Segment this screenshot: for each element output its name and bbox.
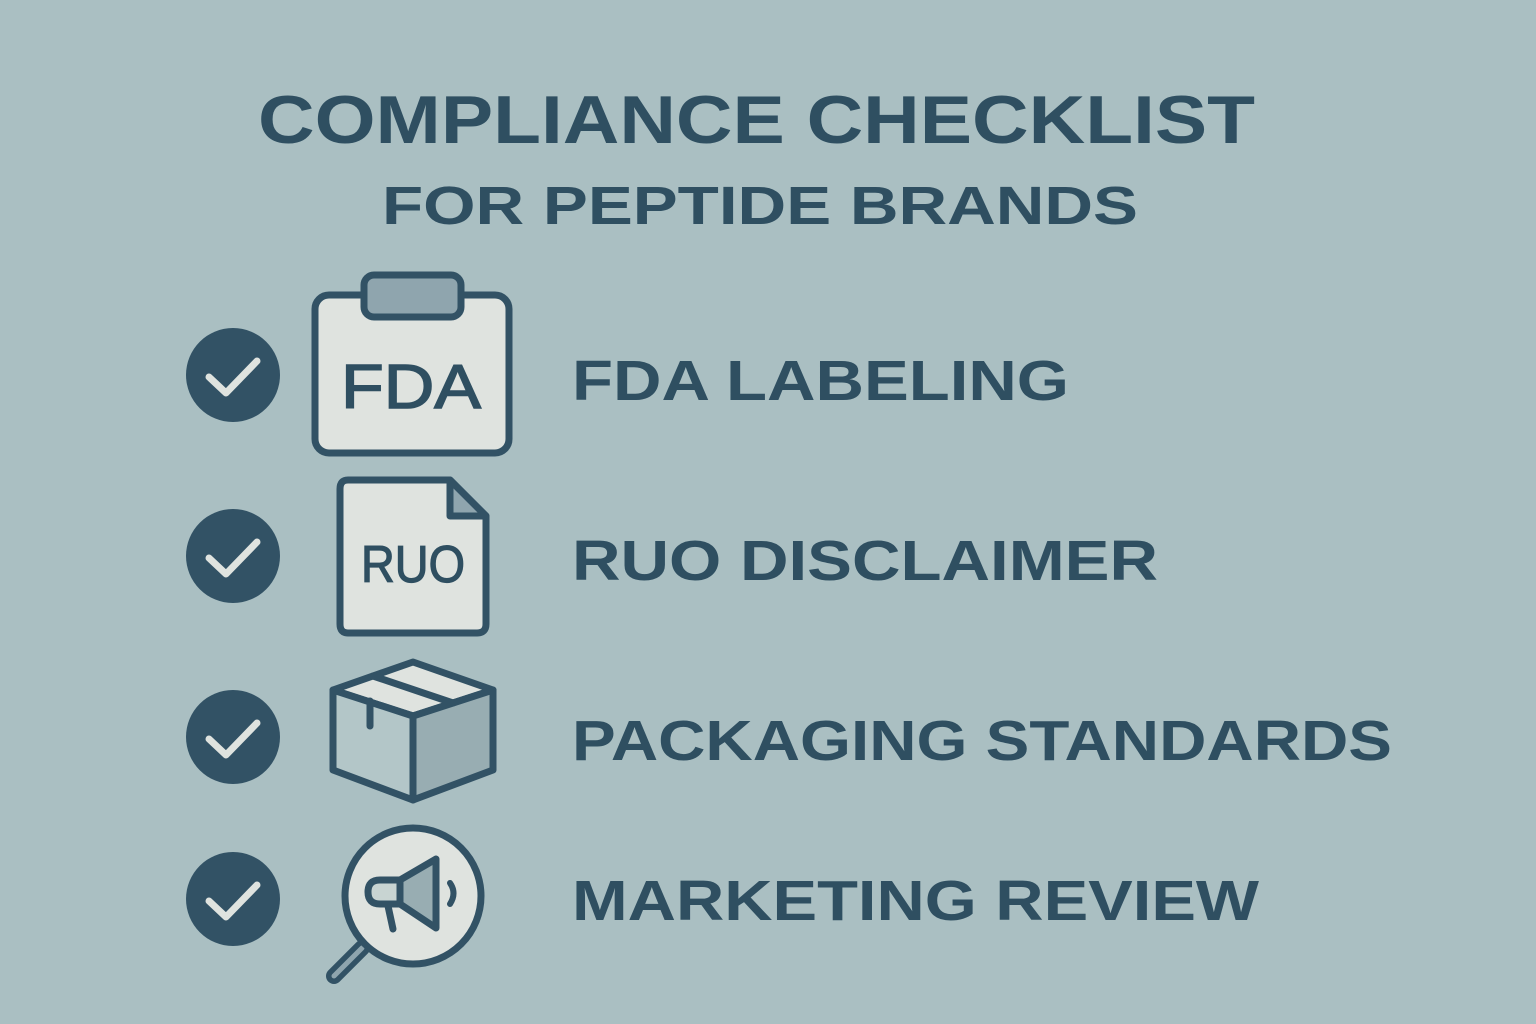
label: FDA labeling: FDA LABELING [572,349,1069,413]
icon: magnifier with megaphone [334,828,481,976]
icon: RUO document [340,480,486,633]
icon: FDA clipboard [315,275,509,453]
subtitle: FOR PEPTIDE BRANDS [382,176,1138,236]
check icon 1 [186,328,280,422]
check icon 3 [186,690,280,784]
row 2: RUO disclaimer [186,480,1158,633]
label: packaging standards: PACKAGING STANDARDS [572,709,1392,773]
check icon 2 [186,509,280,603]
row 1: FDA labeling [186,275,1069,453]
label: marketing review: MARKETING REVIEW [572,869,1259,933]
icon: RUO document: RUO [361,536,465,594]
row 3: Packaging standards [186,662,1392,800]
label: RUO disclaimer: RUO DISCLAIMER [572,529,1158,593]
row 4: Marketing review [186,828,1259,976]
icon: box [333,662,493,800]
check icon 4 [186,852,280,946]
title: COMPLIANCE CHECKLIST [258,82,1255,158]
icon: FDA clipboard: FDA [341,353,482,422]
title [258,82,1255,236]
